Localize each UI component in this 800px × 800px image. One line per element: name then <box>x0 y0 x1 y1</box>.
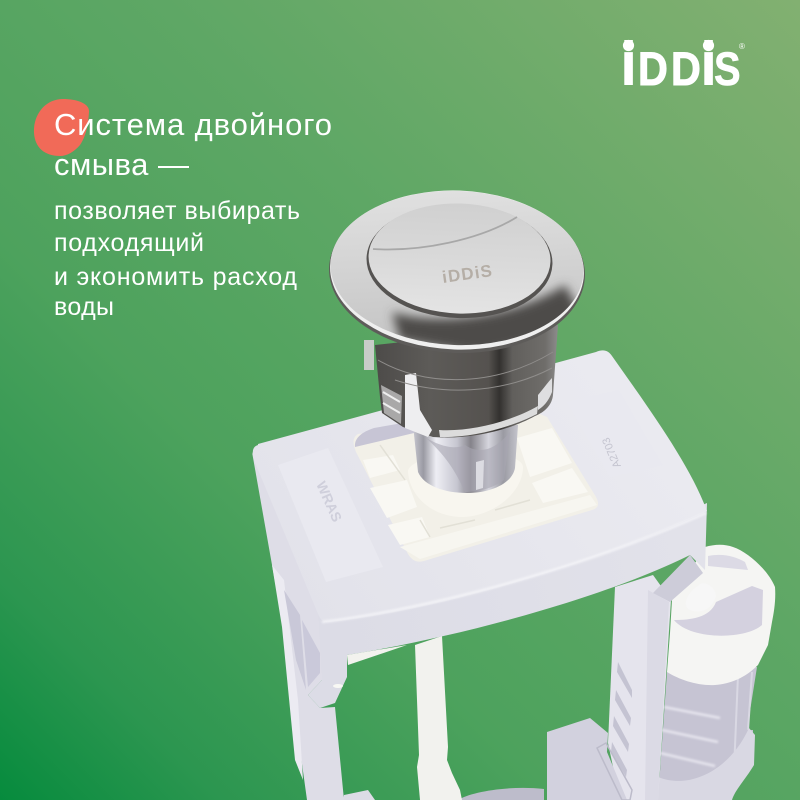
body text <box>54 197 300 321</box>
frame top <box>253 350 707 622</box>
button disc with split line and logo <box>365 200 554 321</box>
frame window with white insert <box>354 412 598 562</box>
right leg <box>608 555 703 800</box>
frame label plate right <box>567 390 663 477</box>
centre rod <box>415 636 462 800</box>
logo: iddis: ® <box>739 42 745 51</box>
heading <box>54 107 332 182</box>
lower block <box>547 718 632 800</box>
chrome stem <box>413 425 518 493</box>
heading: смыва — <box>54 147 189 182</box>
decorative coral blob <box>34 99 89 156</box>
chrome body <box>364 325 558 438</box>
body text: и экономить расход <box>54 263 297 291</box>
frame front lip <box>308 503 707 708</box>
side cylinder <box>658 545 775 800</box>
left leg and side wall <box>252 452 344 800</box>
body text: воды <box>54 293 114 321</box>
frame label plate left <box>278 448 383 582</box>
frame label plate right: A2703 <box>600 436 624 470</box>
logo: iddis: D <box>671 44 701 96</box>
white collar ring <box>408 453 523 517</box>
product: flush mechanism <box>252 186 775 800</box>
logo: iddis: S <box>714 44 741 96</box>
frame label plate left: WRAS <box>313 479 345 524</box>
button flange <box>326 186 590 357</box>
logo: iddis <box>620 30 745 99</box>
body text: подходящий <box>54 229 204 257</box>
logo: iddis: D <box>638 44 668 96</box>
body text: позволяет выбирать <box>54 197 300 225</box>
heading: Система двойного <box>54 107 332 142</box>
logo: iddis: i <box>700 30 717 99</box>
bottom bowl <box>458 788 544 800</box>
logo: iddis: i <box>620 30 637 99</box>
button logo: iDDiS <box>441 261 493 287</box>
